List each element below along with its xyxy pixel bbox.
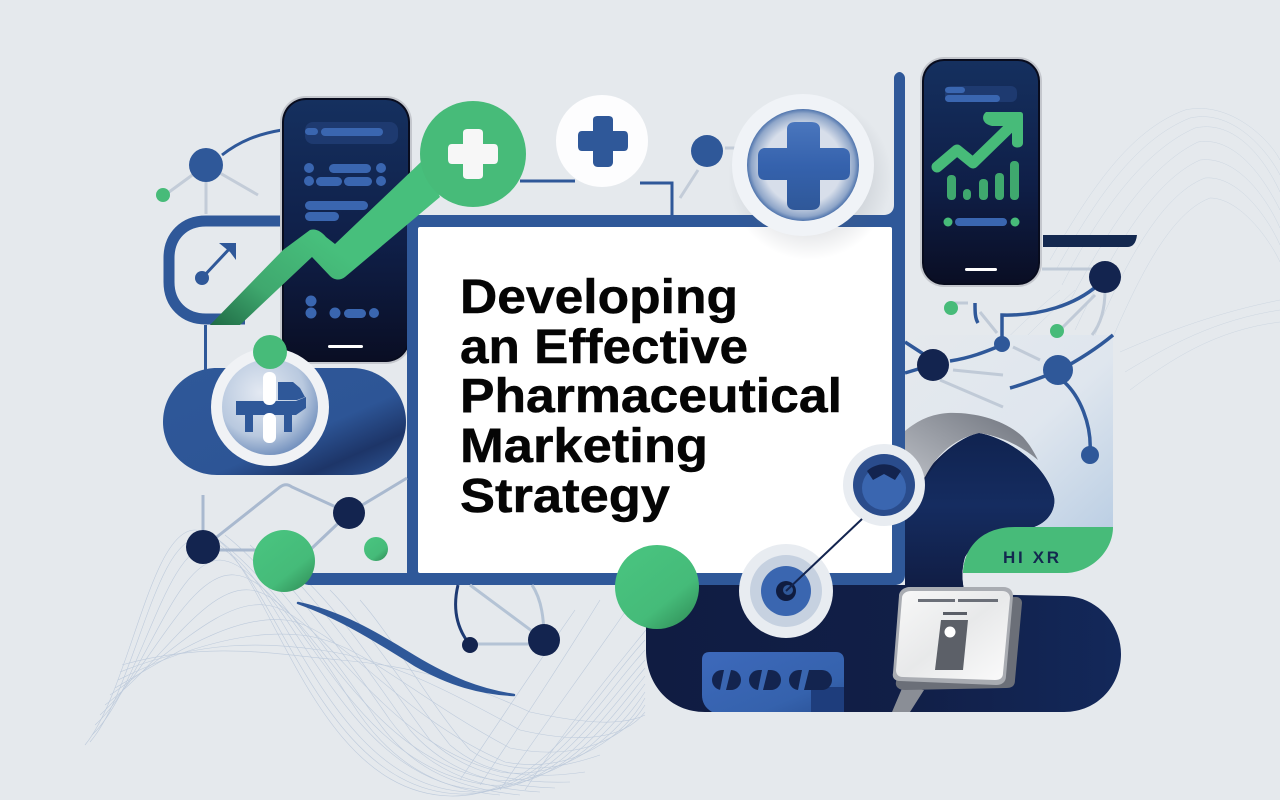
node (189, 148, 223, 182)
toggle: first (712, 670, 741, 690)
green dot (253, 335, 287, 369)
phone content (304, 122, 398, 318)
dark node (186, 530, 220, 564)
left rounded arrow box (169, 221, 282, 370)
bar chart (947, 161, 1019, 200)
label marks: HI XR (1003, 548, 1059, 567)
network: upper left (156, 130, 282, 214)
blue tab with toggles (702, 652, 844, 712)
dark bar beside phone (1043, 235, 1137, 247)
wave mesh: bottom left (85, 530, 650, 796)
big lens with cross (728, 94, 892, 260)
left lens icon (211, 335, 329, 466)
nodes (1089, 261, 1121, 293)
machine glyph (236, 382, 306, 432)
green dot (156, 188, 170, 202)
node (462, 637, 478, 653)
green plus disc (420, 101, 526, 207)
lower lens (739, 544, 833, 638)
green trend arrow (210, 101, 526, 325)
phone header (945, 86, 1017, 102)
connector lines above panel (520, 148, 745, 215)
small green ball (364, 537, 388, 561)
bottom dark shape (646, 433, 1121, 712)
upper lens (843, 444, 925, 526)
title: Pharmaceutical (460, 370, 842, 423)
lens connector line (786, 519, 862, 591)
right phone (920, 57, 1042, 287)
phone slider (944, 218, 952, 226)
white disc with cross (556, 95, 648, 187)
card lines (918, 599, 955, 602)
wave mesh: upper right (905, 108, 1280, 440)
green label strip (963, 527, 1113, 573)
title: Marketing (460, 420, 708, 473)
panel white area (418, 227, 892, 573)
dark node (333, 497, 365, 529)
title (460, 271, 842, 523)
neck of dark shape (905, 433, 1054, 594)
left phone (280, 96, 412, 364)
network: lower left (186, 478, 407, 592)
toggle: second (749, 670, 781, 690)
green trend arrow icon (937, 127, 1010, 167)
card glyph (935, 620, 968, 670)
node (528, 624, 560, 656)
side panel: light blue backdrop (905, 335, 1113, 527)
left blue pill (163, 368, 406, 475)
small blue node (691, 135, 723, 167)
icon: arrow (195, 243, 236, 285)
note card (892, 587, 1022, 712)
title: an Effective (460, 321, 748, 374)
panel frame (298, 72, 905, 585)
title: Strategy (460, 470, 670, 523)
white cross (448, 129, 498, 179)
grey curved band (905, 413, 1038, 497)
vertical connector (204, 325, 207, 370)
title: Developing (460, 271, 738, 324)
network: below panel (456, 585, 560, 656)
network: right (905, 261, 1121, 464)
swoosh line (298, 603, 514, 695)
large green ball (615, 545, 699, 629)
main panel (298, 72, 905, 585)
white bars (263, 372, 276, 405)
green ball (253, 530, 315, 592)
toggle: third (789, 670, 832, 690)
